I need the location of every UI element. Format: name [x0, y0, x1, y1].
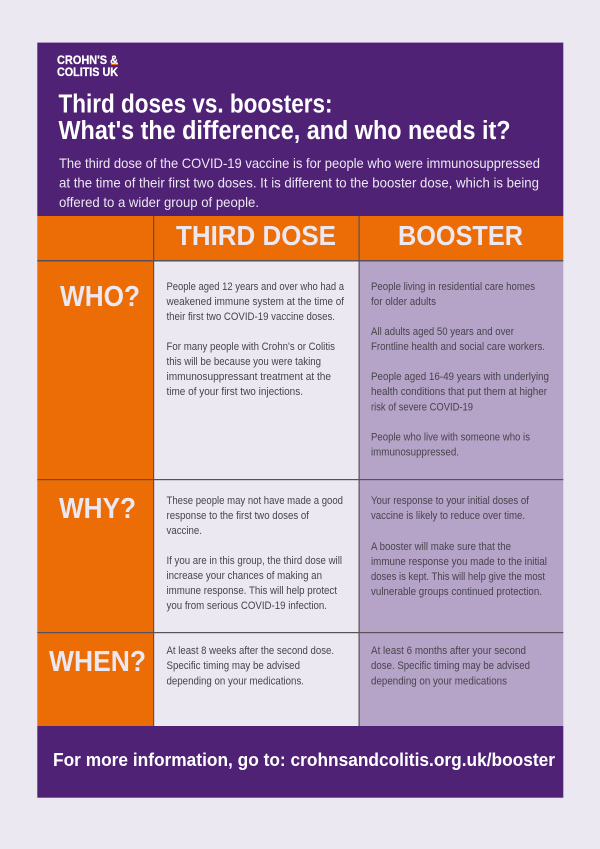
- title: [58, 90, 510, 145]
- cell: who third dose: People aged 12 years and over who had a: [166, 281, 344, 293]
- row heading: who: WHO?: [60, 281, 140, 313]
- intro text: The third dose of the COVID-19 vaccine is for people who were immunosuppressed: [59, 156, 540, 171]
- cell: when third dose: At least 8 weeks after the second dose.: [166, 645, 334, 657]
- cell: who booster: health conditions that put them at higher: [371, 386, 547, 398]
- footer link text: For more information, go to: crohnsandcolitis.org.uk/booster: [53, 750, 555, 770]
- cell: why third dose: vaccine.: [166, 525, 202, 537]
- cell: who booster: Frontline health and social care workers.: [371, 341, 545, 353]
- cell: why booster: [371, 495, 547, 598]
- row heading: when: WHEN?: [49, 646, 146, 678]
- cell: who booster: risk of severe COVID-19: [371, 402, 473, 414]
- cell: when booster: At least 6 months after your second: [371, 645, 526, 657]
- cell: when booster: depending on your medications: [371, 676, 508, 688]
- logo: CROHN'S &: [57, 53, 118, 67]
- intro text: [59, 156, 540, 210]
- cell: who booster: All adults aged 50 years and over: [371, 326, 514, 338]
- cell: why booster: vaccine is likely to reduce over time.: [371, 510, 525, 522]
- cell: who booster: People living in residential care homes: [371, 281, 536, 293]
- cell: why booster: doses is kept. This will help give the most: [371, 571, 545, 583]
- cell: who booster: immunosuppressed.: [371, 446, 459, 458]
- cell: who third dose: this will be because you were taking: [166, 356, 321, 368]
- cell: why booster: A booster will make sure that the: [371, 541, 511, 553]
- cell: why booster: vulnerable groups continued protection.: [371, 586, 542, 598]
- cell: who booster: for older adults: [371, 296, 437, 308]
- logo: COLITIS UK: [57, 65, 118, 79]
- cell: when booster: [371, 645, 530, 688]
- cell: why booster: immune response you made to the initial: [371, 556, 547, 568]
- cell: who third dose: For many people with Crohn's or Colitis: [166, 341, 336, 353]
- cell: why third dose: increase your chances of making an: [166, 570, 322, 582]
- intro text: offered to a wider group of people.: [59, 195, 259, 210]
- cell: who booster: [371, 281, 549, 458]
- title: Third doses vs. boosters:: [58, 90, 332, 118]
- cell: why third dose: response to the first two doses of: [166, 510, 310, 522]
- cell: why booster: Your response to your initial doses of: [371, 495, 530, 507]
- cell: who booster: People aged 16-49 years with underlying: [371, 371, 549, 383]
- cell: why third dose: If you are in this group, the third dose will: [166, 555, 342, 567]
- intro text: at the time of their first two doses. It is different to the booster dose, which is being: [59, 176, 539, 190]
- cell: why third dose: [166, 495, 343, 612]
- table background: [37, 216, 563, 726]
- cell: why third dose: immune response. This will help protect: [166, 585, 337, 597]
- cell: who third dose: [166, 281, 345, 398]
- cell: when third dose: Specific timing may be advised: [166, 660, 300, 672]
- cell: who booster: People who live with someone who is: [371, 432, 531, 444]
- header panel: [37, 43, 563, 216]
- cell: when third dose: [166, 645, 334, 688]
- column heading: third dose: THIRD DOSE: [176, 220, 336, 251]
- column heading: booster: BOOSTER: [398, 220, 523, 251]
- cell: when third dose: depending on your medications.: [166, 676, 304, 688]
- cell: when booster: dose. Specific timing may be advised: [371, 660, 530, 672]
- cell: why third dose: These people may not have made a good: [166, 495, 343, 507]
- title: What's the difference, and who needs it?: [58, 117, 510, 145]
- cell: who third dose: weakened immune system at the time of: [166, 296, 345, 308]
- footer panel: [37, 726, 563, 798]
- cell: who third dose: immunosuppressant treatment at the: [166, 371, 331, 383]
- row heading: why: WHY?: [59, 493, 136, 525]
- logo: [57, 53, 118, 79]
- cell: who third dose: time of your first two injections.: [166, 386, 303, 398]
- cell: who third dose: their first two COVID-19 vaccine doses.: [166, 311, 335, 323]
- cell: why third dose: you from serious COVID-19 infection.: [166, 600, 327, 612]
